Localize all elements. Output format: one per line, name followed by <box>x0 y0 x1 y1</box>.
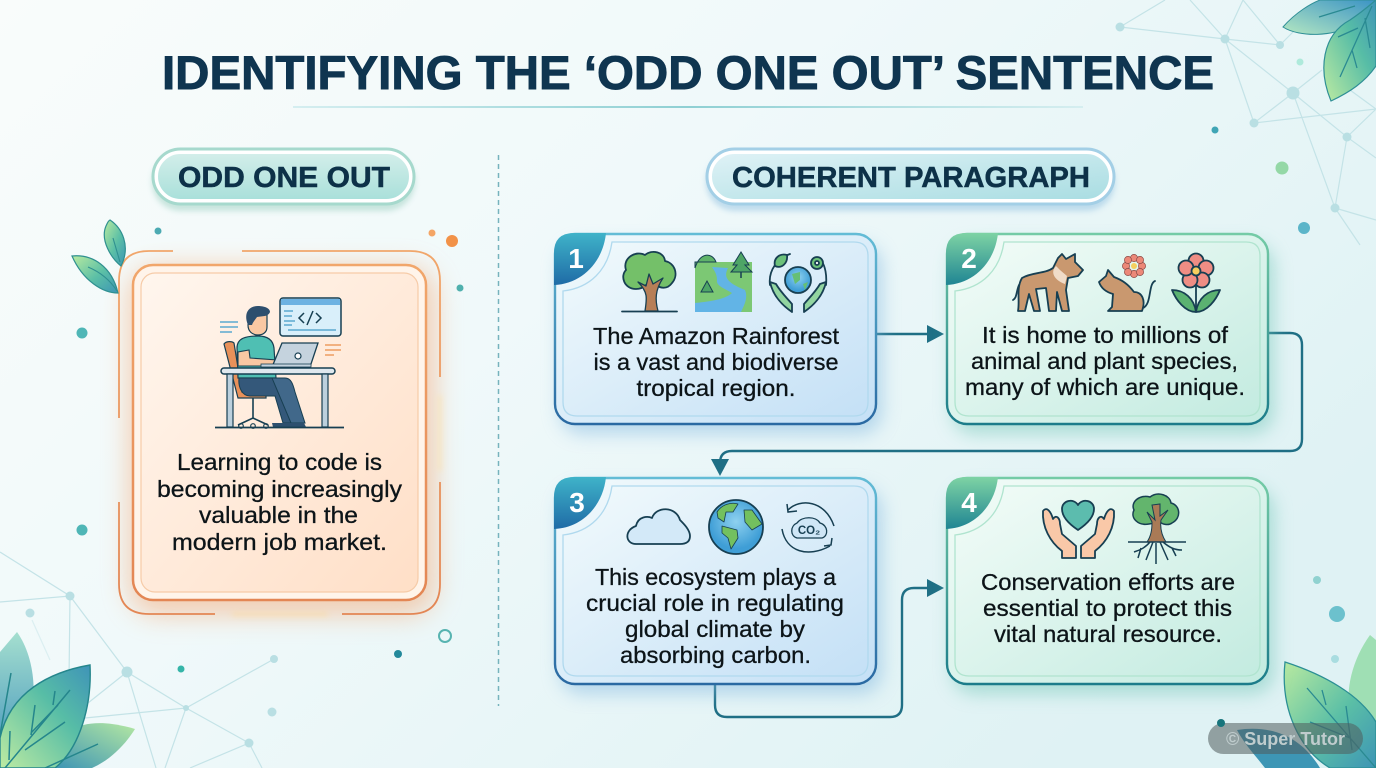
text: card 2 <box>965 322 1245 400</box>
network decoration: bottom left <box>0 552 278 768</box>
icon: river landscape <box>695 252 752 312</box>
text: card 4: essential to protect this <box>983 595 1232 621</box>
icon: cloud <box>627 509 690 544</box>
icon: carbon cycle: CO₂ <box>798 525 820 537</box>
text: odd sentence: Learning to code is <box>177 449 382 475</box>
number badge 2: 2 <box>961 243 977 274</box>
text: card 3: absorbing carbon. <box>620 642 811 668</box>
text: card 3 <box>586 564 844 668</box>
text: card 4: vital natural resource. <box>994 621 1222 647</box>
text: card 1: tropical region. <box>636 375 796 401</box>
divider <box>498 155 500 706</box>
number badge 4 <box>946 477 998 529</box>
main frame <box>133 265 426 600</box>
connector arrow 3 to 4 <box>715 579 944 717</box>
icon: lion <box>1013 254 1083 311</box>
text: card 2: It is home to millions of <box>982 322 1228 348</box>
panel: odd one out card <box>119 251 441 616</box>
floating dots <box>76 58 1345 672</box>
icon: cat with flower <box>1099 254 1155 311</box>
inner frame <box>141 273 418 592</box>
text: card 2: animal and plant species, <box>971 348 1238 374</box>
text: card 4 <box>981 569 1235 647</box>
text: card 1 <box>593 323 839 401</box>
watermark: © Super Tutor <box>1226 729 1345 749</box>
text: card 4: Conservation efforts are <box>981 569 1235 595</box>
heading pill: odd one out: ODD ONE OUT <box>178 162 391 194</box>
connector arrow 2 to 3 <box>711 333 1302 476</box>
leaves: bottom left <box>0 632 135 768</box>
icon: tree with roots <box>1128 494 1186 564</box>
watermark <box>1208 719 1363 754</box>
heading pill: odd one out <box>152 149 415 211</box>
text: card 3: crucial role in regulating <box>586 590 844 616</box>
text: card 1: The Amazon Rainforest <box>593 323 839 349</box>
text: card 3: global climate by <box>625 616 805 642</box>
panel: card 4 <box>946 477 1274 694</box>
panel: card 2 <box>946 233 1274 434</box>
leaves: bottom right <box>1237 635 1376 768</box>
text: odd sentence: valuable in the <box>199 502 358 528</box>
icon: hands holding heart <box>1043 501 1114 558</box>
outer broken frame <box>119 251 440 614</box>
panel: card 1 <box>554 233 882 434</box>
number badge 3: 3 <box>569 487 585 518</box>
frame glow <box>232 395 441 616</box>
icon: person coding at desk <box>215 298 344 428</box>
text: odd sentence <box>157 449 402 555</box>
title underline <box>293 106 1083 108</box>
text: card 3: This ecosystem plays a <box>595 564 837 590</box>
number badge 4: 4 <box>961 487 977 518</box>
number badge 1 <box>554 233 606 285</box>
icon: carbon cycle <box>782 503 834 552</box>
heading pill: coherent paragraph <box>706 149 1115 211</box>
leaves: top right <box>1283 0 1376 101</box>
icon: flower <box>1172 254 1220 312</box>
text: card 1: is a vast and biodiverse <box>594 349 838 375</box>
icon: tree <box>622 252 677 312</box>
number badge 3 <box>554 477 606 529</box>
icon: sprig on odd card <box>72 220 125 293</box>
panel: card 3 <box>554 477 882 694</box>
number badge 1: 1 <box>568 243 584 274</box>
icon: hands around globe <box>770 254 826 312</box>
text: card 2: many of which are unique. <box>965 374 1245 400</box>
heading pill: coherent paragraph: COHERENT PARAGRAPH <box>732 162 1090 194</box>
connector arrow 1 to 2 <box>877 325 944 343</box>
network decoration: top right <box>1116 0 1376 245</box>
icon: earth <box>709 500 763 554</box>
number badge 2 <box>946 233 998 285</box>
text: odd sentence: becoming increasingly <box>157 476 402 502</box>
title: IDENTIFYING THE ‘ODD ONE OUT’ SENTENCE <box>162 46 1214 99</box>
text: odd sentence: modern job market. <box>172 529 387 555</box>
